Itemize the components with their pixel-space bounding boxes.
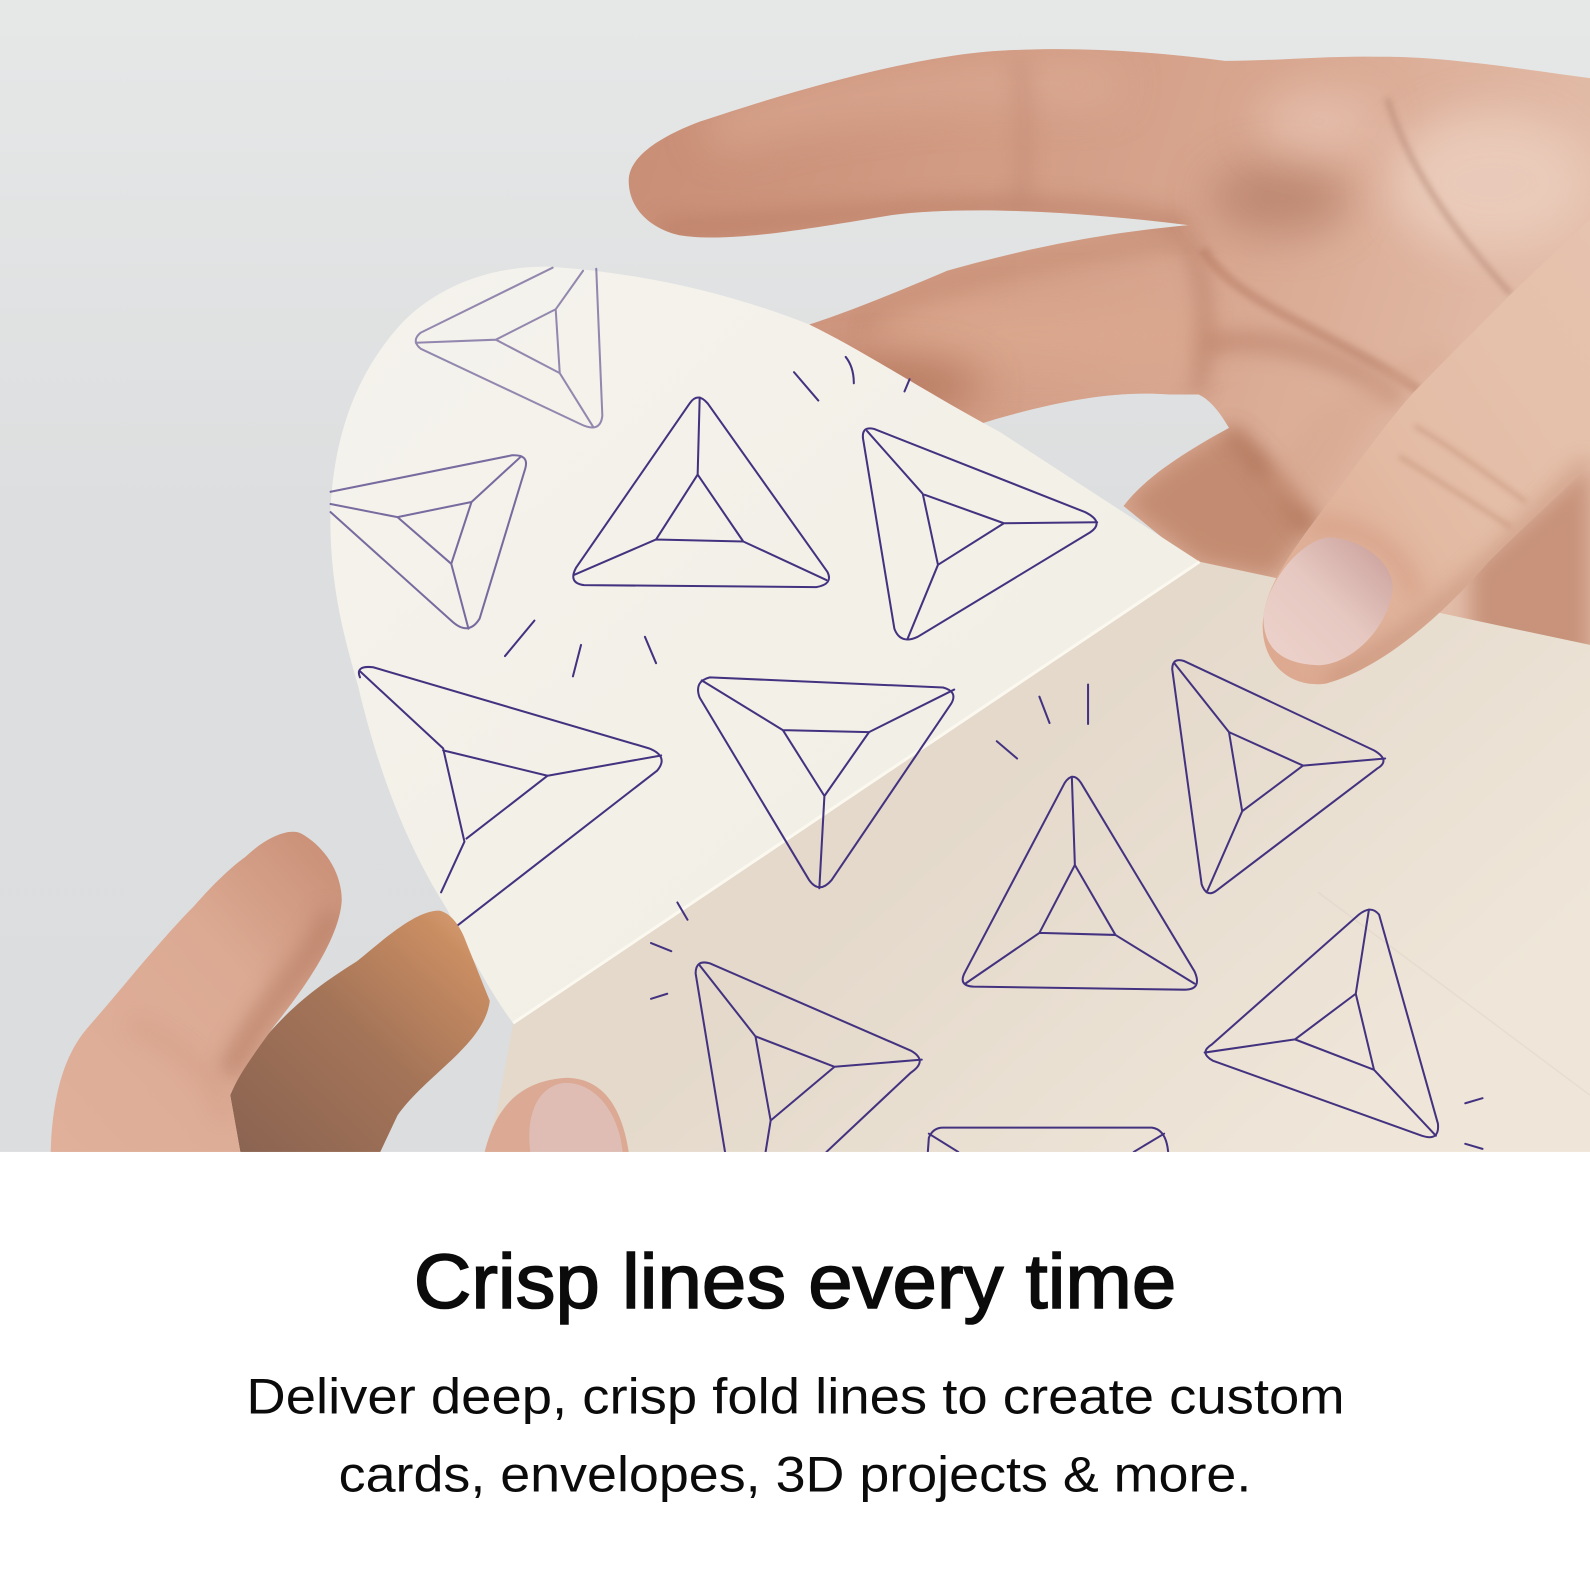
middle finger, brown shaded [230,911,490,1152]
icon: upper right hand [629,49,1590,669]
triangle 8 [963,777,1197,990]
icon: lower thumb holding envelope [485,1078,629,1152]
white caption panel [0,1152,1590,1590]
triangle 6 [698,677,954,888]
icon: lower left hand fingers [51,832,490,1152]
triangle 10 [696,962,922,1152]
grey studio background [0,0,1590,1152]
thumb nail [1263,537,1393,665]
spark ticks [505,357,1483,1149]
triangle 4 (faint) [331,455,526,629]
envelope flap [330,267,1200,1023]
envelope body [485,562,1590,1152]
triangle 7 [1172,660,1385,893]
icon: thumb of upper hand [1262,290,1559,684]
triangle pattern [331,268,1483,1152]
triangle 3 [863,428,1097,640]
triangle 2 [573,398,829,587]
description: cards, envelopes, 3D projects & more. [339,1447,1251,1503]
triangle 1 (top, faint) [416,268,602,427]
triangle 5 [359,667,662,925]
description [246,1369,1345,1503]
photo scene [0,0,1590,1152]
description: Deliver deep, crisp fold lines to create custom [246,1369,1345,1425]
lower thumb nail [529,1083,623,1152]
title: Crisp lines every time [414,1239,1176,1325]
front finger [51,832,342,1152]
triangle 11 (cropped) [928,1128,1168,1152]
triangle 9 [1205,910,1438,1137]
